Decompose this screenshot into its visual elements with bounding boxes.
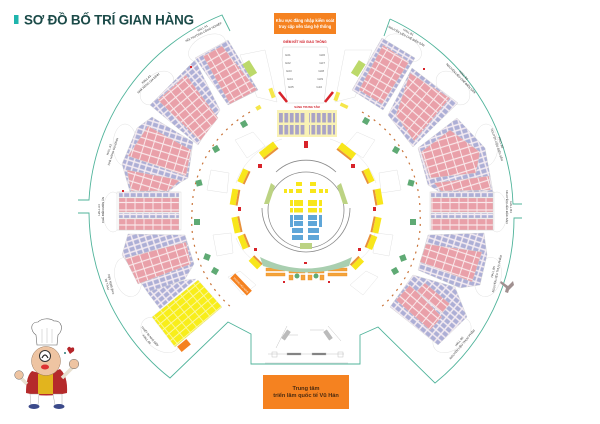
walkway markers: [192, 112, 420, 308]
hall A5: [104, 234, 194, 295]
transport point: G01: [285, 53, 291, 57]
hall B6: HALL B6: [454, 335, 465, 347]
hall A4: [97, 192, 181, 230]
hall A6 yellow: THIẾT BỊ NHÀ BẾP: [140, 325, 160, 347]
hall A3: HALL A3: [105, 143, 113, 156]
hall B5: HALL B5: [490, 265, 496, 278]
transport point: G07: [319, 61, 325, 65]
small side sign right: [500, 281, 514, 293]
orange top box: truy cập nền tảng hệ thống: [279, 24, 332, 29]
venue outer boundary: [78, 15, 522, 383]
hall A5: CHẾ BIẾN SẴN: [106, 274, 115, 295]
hall B2: NGUYÊN LIỆU CHẾ BIẾN SẴN: [445, 62, 477, 94]
hall B3: NGUYÊN LIỆU BIẾN SẴN: [490, 128, 505, 161]
hall B4: NGUYÊN LIỆU ĐẶC SẢN: [505, 190, 510, 224]
mascot legs: [30, 394, 62, 405]
hall A2: NHÀ HÀNG GIA ĐÌNH: [136, 72, 160, 94]
hall B4: HALL B4: [509, 201, 513, 213]
green service blocks: [194, 117, 416, 275]
hall A3: NHÀ HÀNG GIA ĐÌNH: [107, 137, 119, 166]
orange top box: [274, 13, 336, 34]
hall B3: HALL B3: [497, 137, 505, 149]
transport point: G04: [287, 77, 293, 81]
orange hall sign: [230, 273, 252, 296]
light green arcs: [264, 183, 348, 249]
hall A6 yellow: [140, 279, 222, 347]
hall A1: [184, 20, 258, 105]
hall A2: HALL A2: [141, 74, 152, 85]
mascot head: [32, 346, 60, 376]
bottom small green blocks: [294, 274, 318, 278]
transport point: G03: [286, 69, 292, 73]
yellow posts near entrance: [255, 88, 348, 111]
orange centre name box: triển lãm quốc tế Vũ Hán: [273, 392, 339, 399]
faint lobes and walkway outlines: [103, 28, 507, 360]
mascot body: [26, 369, 67, 396]
mascot heart: [67, 347, 74, 354]
orange hall sign: PHÒNG HỘI NGHỊ: [233, 277, 249, 294]
hall B5: [418, 233, 503, 293]
transport point: [282, 39, 329, 103]
hall A2: [136, 60, 220, 145]
hall B3: [418, 118, 505, 192]
transport point: G08: [318, 69, 324, 73]
transport point: G10: [316, 85, 322, 89]
central seats blue: [290, 215, 322, 240]
central top hall: [277, 104, 337, 137]
hall A1: HỘI TRƯỜNG CÔNG NGHIỆP: [184, 20, 223, 43]
hall B6: NGUYÊN LIỆU THỰC PHẨM: [448, 327, 476, 360]
hall A3: [105, 117, 193, 192]
hall A4: CHẾ BIẾN MÓN ĂN: [100, 197, 105, 223]
hall B1: [352, 24, 426, 110]
transport point: G05: [288, 85, 294, 89]
hall A5: HALL A5: [104, 278, 110, 290]
hall B1: NGUYÊN LIỆU CHẾ BIẾN SẴN: [388, 24, 426, 47]
green band: [260, 257, 352, 272]
hall B5: NGUYÊN LIỆU THỰC PHẨM: [490, 254, 503, 293]
bottom entrance plan: [265, 326, 348, 363]
orange centre name box: [263, 375, 349, 409]
transport point: G09: [317, 77, 323, 81]
title: SƠ ĐỒ BỐ TRÍ GIAN HÀNG: [24, 12, 194, 28]
bottom orange booths: [266, 268, 347, 280]
orange centre name box: Trung tâm: [292, 386, 320, 392]
hall B1: HALL B1: [402, 28, 415, 37]
hall A1: HALL A1: [197, 24, 209, 32]
red markers: [122, 66, 425, 283]
hall A4: HALL A4: [97, 204, 101, 216]
transport point: G02: [285, 61, 291, 65]
red arrows: [279, 92, 333, 102]
hall B2: HALL B2: [458, 70, 469, 81]
central top hall: SẢNH TRUNG TÂM: [294, 104, 320, 109]
orange top box: Khu vực đăng nhập kiểm soát: [276, 18, 335, 23]
mascot chef: [15, 319, 79, 409]
hall B6: [390, 275, 476, 360]
hall B2: [388, 62, 477, 147]
ring yellow booths: [230, 142, 383, 270]
transport point: G06: [319, 53, 325, 57]
light green lounges: [242, 60, 366, 77]
central stage yellow seats: [284, 182, 328, 212]
hall B4: [430, 190, 513, 230]
transport point: ĐIỂM KẾT NỐI GIAO THÔNG: [283, 39, 327, 44]
orange small sign: [177, 339, 191, 352]
central arena rings: [262, 160, 350, 252]
hall A6 yellow: HALL A6: [142, 334, 152, 345]
